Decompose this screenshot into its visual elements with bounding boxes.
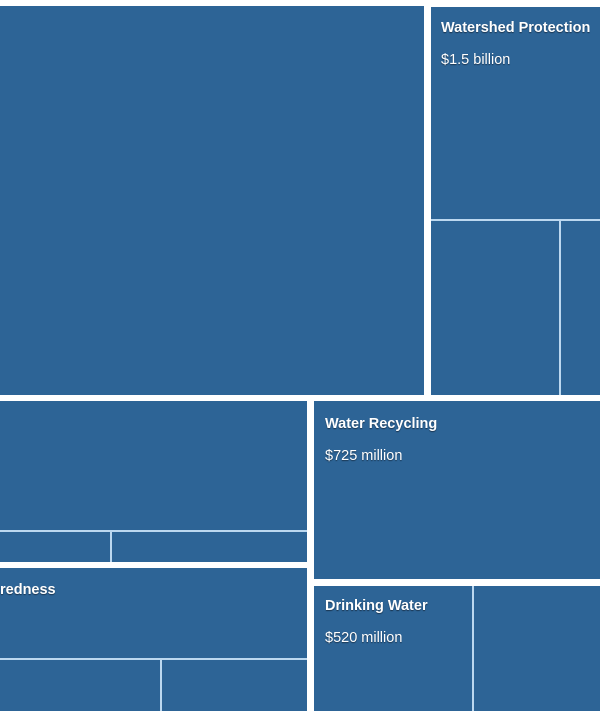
panel: water recycling — [314, 401, 600, 579]
panel: watershed protection — [431, 7, 600, 395]
panel: preparedness — [0, 568, 307, 711]
label: drinking water value: $520 million — [325, 630, 402, 646]
panel: drinking water — [314, 586, 600, 711]
label: preparedness title: redness — [0, 582, 56, 598]
panel: large top-left block — [0, 6, 424, 395]
label: drinking water title: Drinking Water — [325, 598, 428, 614]
panel: left-bottom upper block — [0, 401, 307, 562]
label: water recycling value: $725 million — [325, 448, 402, 464]
label: water recycling title: Water Recycling — [325, 416, 437, 432]
label: watershed value: $1.5 billion — [441, 52, 510, 68]
label: watershed protection title: Watershed Protection — [441, 20, 590, 36]
